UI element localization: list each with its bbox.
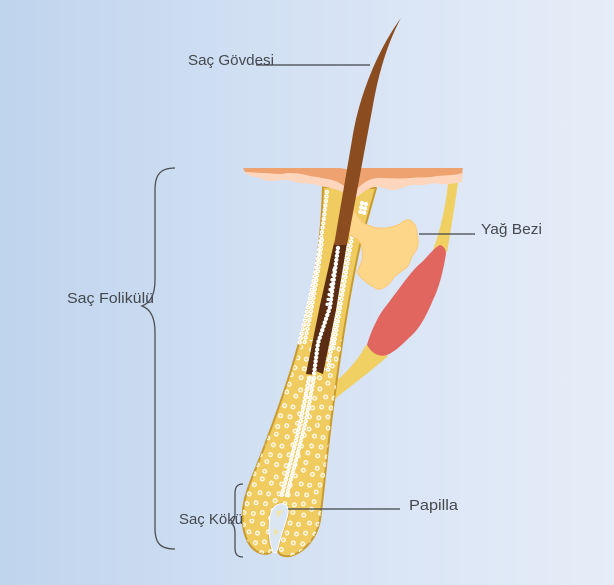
leader lines [256,65,475,509]
sebaceous gland [349,210,418,289]
brace: hair root [231,484,243,557]
brace: hair follicle [142,168,175,549]
label: papilla: Papilla [409,497,459,514]
follicle [240,187,376,558]
label: sebaceous gland: Yağ Bezi [481,221,542,238]
label: follicle: Saç Folikülü [67,290,154,307]
papilla [269,504,288,553]
root cells [240,340,345,558]
hair shaft [334,18,401,245]
label: root: Saç Kökü [179,511,243,528]
hair inner root [306,243,347,375]
label: hair shaft: Saç Gövdesi [188,52,274,69]
cell strips [281,192,366,498]
muscle [367,245,446,356]
arrector pili muscle strap [335,183,458,399]
skin [243,168,463,197]
